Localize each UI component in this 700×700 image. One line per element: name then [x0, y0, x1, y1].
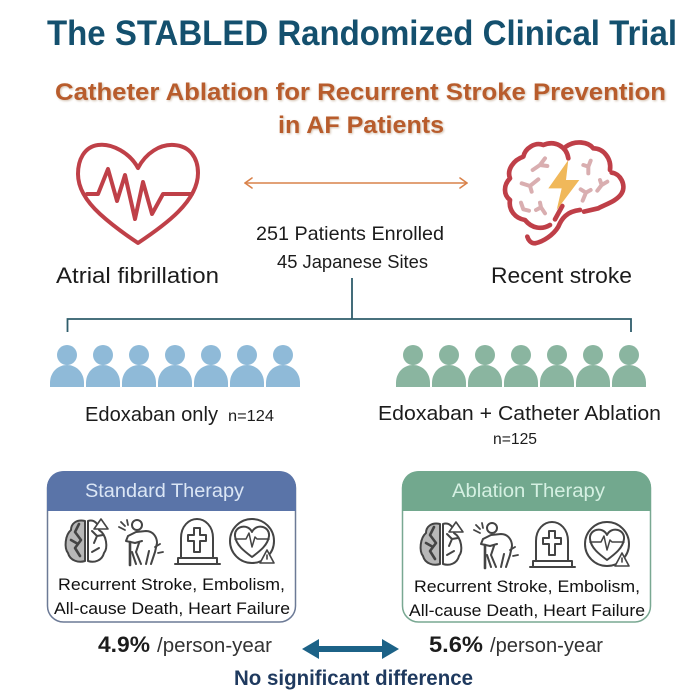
label: edoxaban only: Edoxaban only — [85, 404, 218, 426]
double arrow: comparison — [302, 639, 399, 659]
label: edoxaban plus catheter ablation — [378, 403, 661, 448]
panel: ablation therapy — [402, 471, 651, 622]
randomization bracket — [68, 278, 631, 332]
label: atrial fibrillation: Atrial fibrillation — [56, 263, 219, 288]
result: ablation therapy rate: /person-year — [490, 635, 603, 657]
outcome icons: ablation therapy — [421, 522, 629, 568]
icon: heart with ECG trace — [78, 145, 198, 243]
patient group: edoxaban only icons — [50, 345, 300, 387]
outcome text: ablation therapy — [409, 577, 645, 620]
outcome icons: standard therapy — [66, 519, 274, 565]
result: standard therapy rate — [98, 632, 272, 657]
outcome text: standard therapy — [54, 575, 290, 618]
enrollment text: 251 Patients Enrolled — [256, 223, 444, 245]
panel header: standard therapy — [47, 471, 296, 511]
subtitle — [55, 79, 666, 139]
enrollment text: 45 Japanese Sites — [277, 251, 428, 272]
outcome text: standard therapy: Recurrent Stroke, Embolism, — [58, 575, 285, 594]
panel header: ablation therapy — [402, 471, 651, 511]
outcome text: ablation therapy: Recurrent Stroke, Embolism, — [414, 577, 640, 596]
subtitle: Catheter Ablation for Recurrent Stroke Prevention — [55, 79, 666, 106]
panel: standard therapy — [47, 471, 296, 622]
result: ablation therapy rate — [429, 632, 603, 657]
label: edoxaban only: n=124 — [228, 408, 274, 425]
enrollment text — [256, 223, 444, 272]
subtitle: in AF Patients — [278, 112, 444, 139]
header text: ablation therapy: Ablation Therapy — [452, 481, 606, 502]
label: edoxaban only — [85, 404, 274, 426]
conclusion: No significant difference — [234, 667, 473, 690]
patient group: ablation icons — [396, 345, 646, 387]
double arrow: AF to stroke — [245, 178, 467, 188]
result: ablation therapy rate: 5.6% — [429, 632, 483, 657]
label: recent stroke: Recent stroke — [491, 263, 632, 288]
outcome text: standard therapy: All-cause Death, Heart Failure — [54, 599, 290, 618]
title: The STABLED Randomized Clinical Trial — [47, 14, 677, 53]
header text: standard therapy: Standard Therapy — [85, 481, 245, 502]
outcome text: ablation therapy: All-cause Death, Heart Failure — [409, 601, 645, 620]
icon: brain with lightning bolt — [505, 142, 623, 243]
label: edoxaban plus catheter ablation: n=125 — [493, 431, 537, 448]
result: standard therapy rate: 4.9% — [98, 632, 150, 657]
result: standard therapy rate: /person-year — [157, 635, 272, 657]
label: edoxaban plus catheter ablation: Edoxaban + Catheter Ablation — [378, 403, 661, 425]
